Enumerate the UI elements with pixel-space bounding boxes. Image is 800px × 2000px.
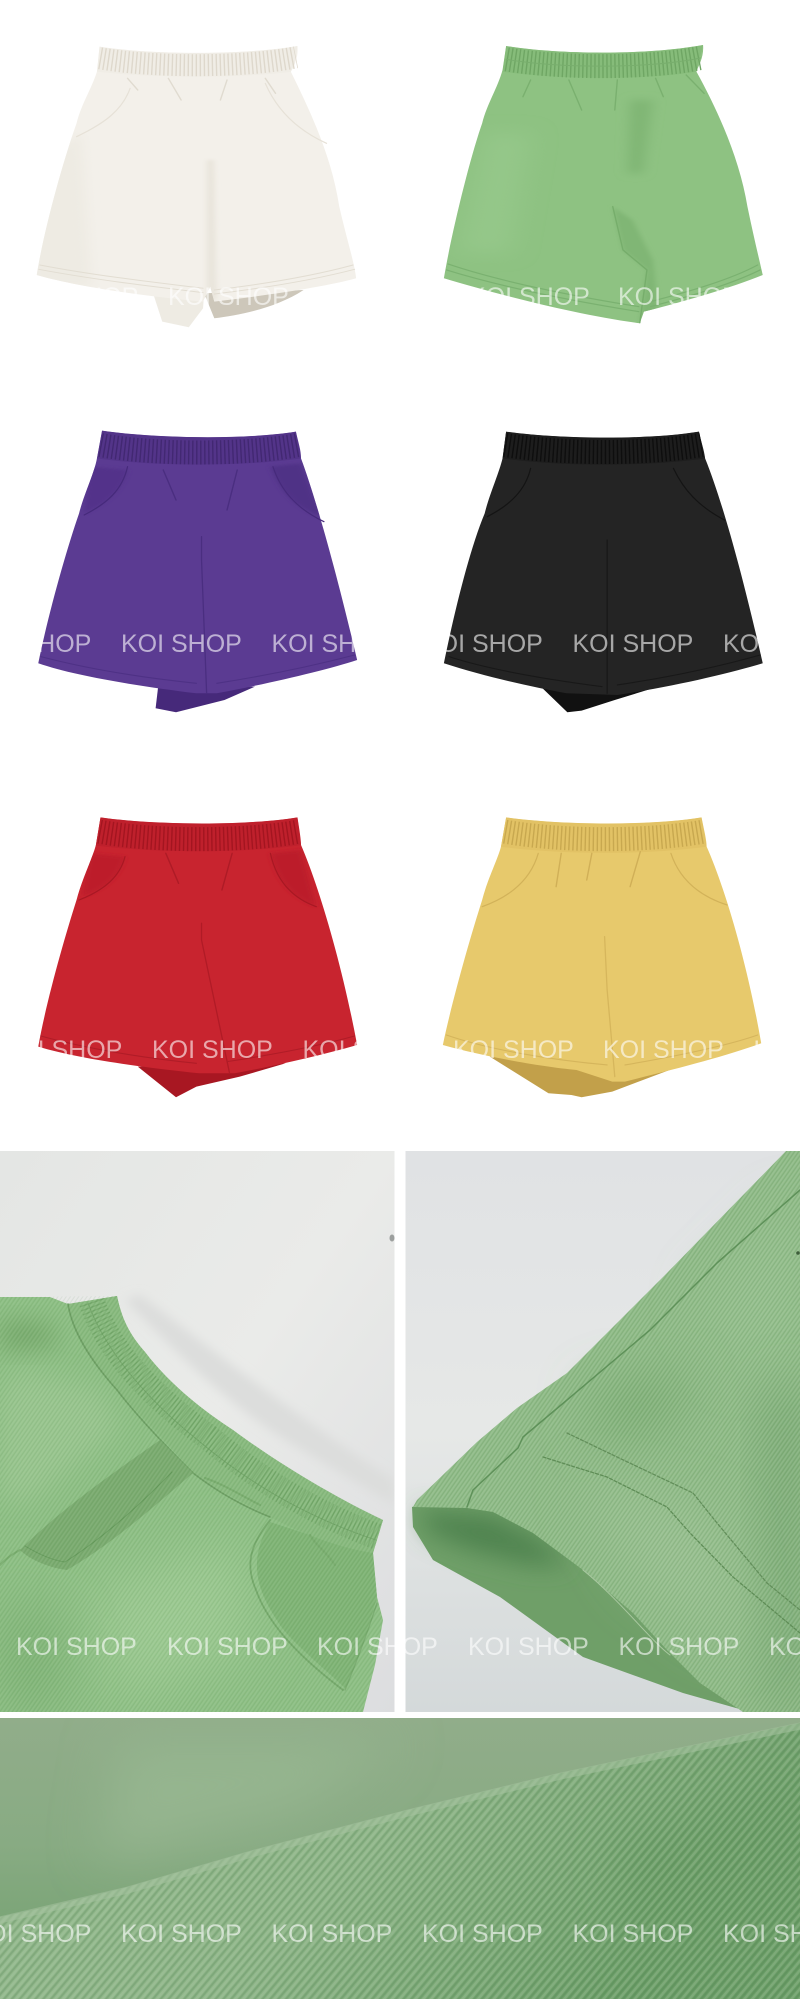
pocket folds xyxy=(0,1478,335,1565)
hem edge highlight xyxy=(583,1570,670,1655)
red shorts center seam xyxy=(202,923,230,1073)
waistband photo backdrop xyxy=(0,1151,394,1712)
black shorts pockets xyxy=(487,468,724,520)
watermark row 1: KOI SHOP xyxy=(318,283,439,311)
product photo: green shorts xyxy=(444,45,763,323)
yellow shorts pockets xyxy=(482,853,727,907)
watermark row 3: KOI SHOP xyxy=(2,1036,122,1064)
waistband gathers xyxy=(92,1302,378,1537)
product photo: yellow shorts xyxy=(443,817,761,1097)
waistband seam shadow xyxy=(68,1304,270,1517)
black shorts back panel xyxy=(541,687,658,712)
side seam xyxy=(467,1190,800,1507)
watermark row 4 xyxy=(16,1633,800,1661)
black shorts body xyxy=(444,432,763,695)
yellow shorts waistband gathers xyxy=(505,832,703,839)
waistband stitching xyxy=(88,1303,376,1540)
purple shorts center seam xyxy=(202,537,207,693)
elastic waistband xyxy=(68,1296,383,1553)
watermark row 3: KOI SHOP xyxy=(152,1036,273,1064)
green shorts waistband channel xyxy=(506,58,701,66)
background light streak xyxy=(100,1740,400,1860)
watermark row 2 xyxy=(0,630,800,658)
purple shorts shading xyxy=(84,431,321,517)
foreground fabric xyxy=(0,1723,800,1999)
white shorts folds xyxy=(128,78,276,100)
watermark row 3: KOI SHOP xyxy=(453,1036,574,1064)
watermark row 1: KOI SHOP xyxy=(618,283,739,311)
blurred background fabric xyxy=(0,1718,800,1999)
red shorts body xyxy=(38,817,357,1073)
fabric light and shade xyxy=(8,1382,106,1490)
watermark row 1: KOI SHOP xyxy=(168,283,289,311)
watermark row 2: KOI SHOP xyxy=(121,630,242,658)
detail photo: hem close-up xyxy=(406,1148,800,1712)
watermark row 5 xyxy=(0,1920,800,1948)
purple shorts back panel xyxy=(156,687,255,712)
green shorts waistband gathers xyxy=(507,58,701,66)
hem stitching line lower xyxy=(543,1457,800,1633)
white shorts back flap xyxy=(153,293,204,327)
watermark row 1: KOI SHOP xyxy=(469,283,590,311)
fabric twill texture xyxy=(0,1296,383,1712)
fold highlight xyxy=(0,1726,800,1920)
watermark row 2: KOI SHOP xyxy=(572,630,693,658)
white shorts shading xyxy=(40,153,216,299)
hem fabric twill texture xyxy=(413,1148,800,1712)
yellow shorts shading xyxy=(501,818,703,846)
watermark row 5: KOI SHOP xyxy=(121,1920,242,1948)
black shorts shading xyxy=(502,432,705,458)
watermark row 3 xyxy=(2,1036,800,1064)
red shorts back panel xyxy=(138,1063,286,1097)
red shorts hem stitching xyxy=(41,1036,355,1063)
watermark row 2: KOI SHOP xyxy=(272,630,392,658)
yellow shorts body xyxy=(443,817,761,1082)
foreground shade xyxy=(620,1800,800,1999)
watermark row 5: KOI SHOP xyxy=(422,1920,543,1948)
white shorts body xyxy=(37,46,356,302)
purple shorts folds xyxy=(163,470,237,510)
detail photo: fabric twill macro xyxy=(0,1718,800,1999)
white shorts pockets xyxy=(77,83,327,143)
yellow shorts back panel xyxy=(490,1057,679,1097)
product photo: purple shorts xyxy=(38,431,357,712)
watermark row 1: KOI SHOP xyxy=(18,283,138,311)
watermark row 4: KOI SHOP xyxy=(16,1633,137,1661)
white shorts hem stitching xyxy=(39,265,355,294)
watermark row 3: KOI SHOP xyxy=(603,1036,724,1064)
watermark row 4: KOI SHOP xyxy=(468,1633,589,1661)
hem photo backdrop xyxy=(406,1151,800,1712)
dust mark xyxy=(390,1234,394,1242)
green shorts hem stitching xyxy=(446,264,760,312)
red shorts pockets xyxy=(79,853,316,907)
yellow shorts center seam xyxy=(605,937,615,1077)
pocket flap xyxy=(20,1440,193,1570)
hem fabric light and shade xyxy=(700,1200,800,1370)
green shorts center slit xyxy=(613,207,647,323)
black shorts center seam xyxy=(606,540,608,693)
product photo: black shorts xyxy=(444,432,763,712)
hem underside shadow xyxy=(420,1510,570,1565)
purple shorts pockets xyxy=(84,467,324,522)
red shorts shading xyxy=(82,817,316,907)
black shorts waistband gathers xyxy=(505,445,702,452)
watermark row 4: KOI SHOP xyxy=(167,1633,288,1661)
purple shorts hem stitching xyxy=(41,655,355,683)
yellow shorts hem stitching xyxy=(446,1035,758,1065)
red shorts folds xyxy=(166,853,232,890)
product photo: red shorts xyxy=(38,817,357,1097)
white shorts inner back panel xyxy=(204,290,304,318)
white shorts waistband gathers xyxy=(100,57,296,65)
hem stitching line upper xyxy=(567,1433,800,1610)
green shorts body xyxy=(444,45,763,323)
dust mark xyxy=(796,1251,800,1255)
watermark row 4: KOI SHOP xyxy=(317,1633,438,1661)
inside pocket panel xyxy=(257,1522,377,1688)
watermark row 2: KOI SHOP xyxy=(422,630,543,658)
yellow shorts folds xyxy=(556,852,640,887)
watermark row 4: KOI SHOP xyxy=(618,1633,739,1661)
detail photo: waistband close-up xyxy=(0,1151,394,1712)
right pocket opening xyxy=(250,1520,343,1690)
green shorts folds xyxy=(523,75,704,110)
waistband photo soft shadow xyxy=(134,1300,364,1478)
watermark row 3: KOI SHOP xyxy=(302,1036,423,1064)
foreground twill texture xyxy=(0,1723,800,1999)
black shorts hem stitching xyxy=(449,655,760,687)
red shorts waistband gathers xyxy=(99,832,298,839)
lower-right strip edge xyxy=(345,1603,377,1690)
hem fabric top xyxy=(413,1148,800,1712)
watermark row 1 xyxy=(18,283,739,311)
purple shorts body xyxy=(38,431,357,693)
product photo: white shorts xyxy=(31,46,356,327)
green shorts shading xyxy=(459,45,703,323)
purple shorts waistband gathers xyxy=(101,445,298,452)
watermark row 5: KOI SHOP xyxy=(272,1920,392,1948)
pocket flap stitching xyxy=(25,1472,172,1562)
fabric body xyxy=(0,1296,383,1712)
watermark row 5: KOI SHOP xyxy=(572,1920,693,1948)
hem underside xyxy=(412,1506,738,1709)
